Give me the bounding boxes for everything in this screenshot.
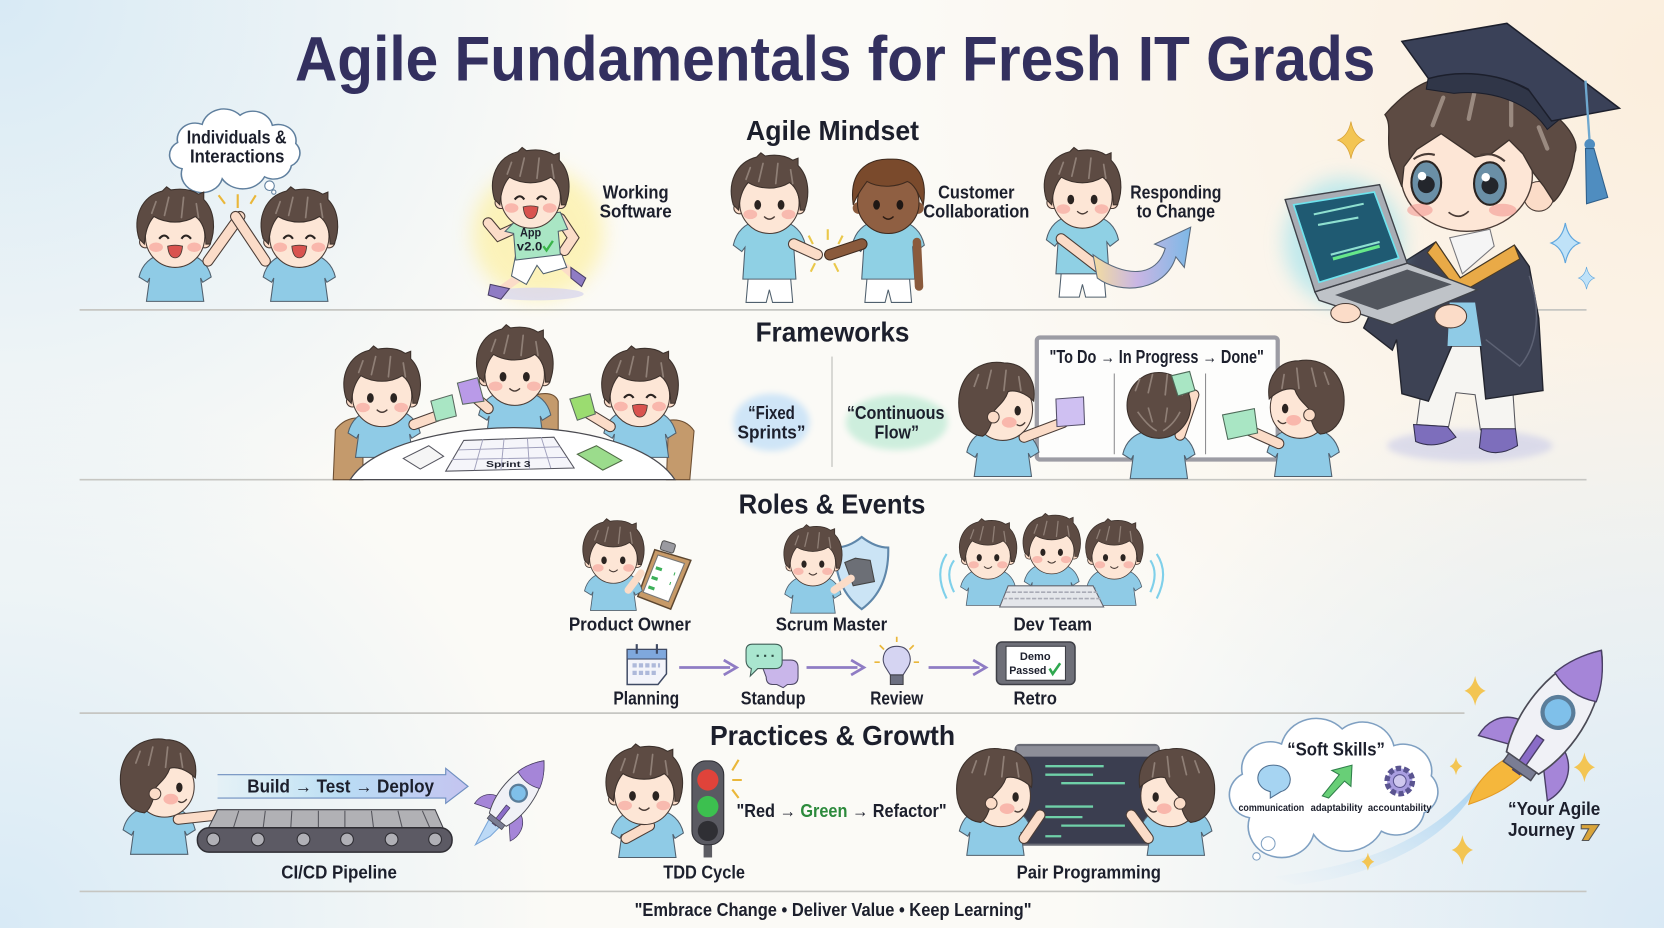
- label: Customer Collaboration: Collaboration: [923, 202, 1029, 222]
- two kids: [957, 749, 1215, 855]
- sparkles: [1338, 122, 1594, 289]
- panel: responding to change: [1044, 148, 1221, 297]
- kid holding rainbow arrow: [1044, 148, 1191, 297]
- event labels: Planning: [613, 689, 679, 709]
- glow behind laptop: [1284, 178, 1403, 306]
- role: Product Owner: Product Owner: [569, 614, 691, 634]
- label: Working Software: Software: [600, 202, 672, 222]
- running kid: v2.0: [517, 240, 542, 253]
- gown: [1364, 242, 1543, 401]
- title: Agile Fundamentals for Fresh IT Grads: [295, 25, 1375, 95]
- icon: tablet Demo Passed: [996, 642, 1075, 684]
- skill labels: accountability: [1368, 803, 1432, 814]
- kid pushing conveyor: [120, 739, 218, 854]
- panel: TDD cycle: TDD Cycle: [663, 863, 745, 883]
- whiteboard: "To Do → In Progress → Done": [1050, 347, 1264, 367]
- label: Customer Collaboration: Customer: [938, 182, 1015, 202]
- label: Your Agile Journey: “Your Agile: [1508, 799, 1600, 819]
- whiteboard: [1037, 337, 1278, 460]
- held cards: [431, 378, 595, 421]
- role: Scrum Master: [776, 525, 888, 634]
- collar and hood: [1427, 242, 1520, 293]
- icon: small rocket: [470, 743, 564, 845]
- kid: [784, 525, 851, 613]
- role: Product Owner: [569, 519, 691, 634]
- heading: Agile Mindset: Agile Mindset: [746, 115, 919, 146]
- graduation cap: [1402, 23, 1619, 129]
- panel: your agile journey rocket: [1273, 621, 1639, 885]
- panel: customer collaboration: [731, 153, 1029, 302]
- chairs: [333, 394, 694, 480]
- role: Scrum Master: Scrum Master: [776, 614, 887, 634]
- thought cloud: Individuals & Interactions: Interactions: [190, 146, 284, 166]
- running kid: [488, 148, 586, 300]
- clipboard: [638, 540, 691, 609]
- tassel: [1584, 81, 1608, 204]
- panel: CI/CD pipeline: [120, 739, 564, 883]
- icon: green arrow: [1322, 765, 1352, 798]
- table with calendar and cards: [350, 428, 675, 480]
- skill labels: adaptability: [1311, 803, 1363, 814]
- icon: calendar: [627, 644, 666, 684]
- laptop: [1285, 185, 1477, 325]
- skill labels: [1238, 803, 1432, 814]
- yellow glow: [472, 168, 604, 299]
- arrow: [679, 660, 736, 675]
- label: Responding to Change: Responding: [1130, 182, 1221, 202]
- rocket trail: [1273, 780, 1480, 885]
- footer tagline: "Embrace Change • Deliver Value • Keep Learning": [635, 900, 1032, 920]
- icon: gear: [1387, 768, 1412, 794]
- conveyor belt: [197, 810, 452, 852]
- icon: tablet Demo Passed: Demo: [1020, 651, 1051, 663]
- label: Customer Collaboration: [923, 182, 1029, 222]
- two kids shaking hands: [731, 153, 924, 302]
- event labels: Retro: [1013, 689, 1057, 709]
- shield: [835, 537, 888, 609]
- bubble: Fixed Sprints: Sprints”: [738, 422, 805, 442]
- three kids: [344, 325, 678, 457]
- three kids with keyboard: [959, 513, 1143, 607]
- kid: [583, 519, 644, 610]
- kids moving cards: [959, 360, 1344, 479]
- label: Responding to Change: to Change: [1137, 202, 1215, 222]
- text: Red Green Refactor: "Red → Green → Refactor": [736, 801, 947, 821]
- label: Your Agile Journey: Journey: [1508, 820, 1575, 840]
- heading: Roles & Events: Roles & Events: [739, 489, 925, 520]
- icon: light bulb: [874, 637, 919, 684]
- icon: traffic light: [692, 760, 742, 857]
- panel: TDD cycle: [606, 744, 947, 883]
- panel: individuals and interactions: [137, 109, 338, 301]
- event labels: [613, 689, 1057, 709]
- event flow: [613, 637, 1075, 709]
- label: Working Software: Working: [603, 182, 669, 202]
- trousers and shoes: [1414, 345, 1518, 453]
- panel: soft skills thought cloud: [1229, 718, 1438, 860]
- arrow: Build Test Deploy: [218, 768, 468, 803]
- kid: [606, 744, 683, 857]
- icon: speech bubble: [1258, 765, 1290, 798]
- heading: Frameworks: Frameworks: [756, 317, 909, 348]
- table with calendar and cards: Sprint 3: [486, 459, 531, 469]
- bubble: Continuous Flow: [846, 395, 948, 450]
- label: Working Software: [600, 182, 672, 222]
- flame: [1469, 756, 1528, 804]
- cloud: [1229, 718, 1438, 860]
- running kid: App: [520, 227, 541, 240]
- panel: pair programming: Pair Programming: [1017, 863, 1161, 883]
- panel: kanban board: [959, 337, 1344, 479]
- ground shadow: [1387, 430, 1553, 462]
- hands: [1331, 304, 1467, 328]
- icon: tablet Demo Passed: Passed: [1009, 665, 1047, 677]
- icon: chat bubbles: [746, 644, 798, 688]
- gold sparkles: [1362, 676, 1595, 871]
- arrow: Build Test Deploy: Build → Test → Deploy: [247, 777, 434, 797]
- thought cloud: Individuals & Interactions: [170, 109, 300, 194]
- panel: team at sprint table: [333, 325, 694, 480]
- bubble: Continuous Flow: Flow”: [874, 422, 919, 442]
- code monitor: [1016, 745, 1159, 845]
- panel: CI/CD pipeline: CI/CD Pipeline: [281, 863, 397, 883]
- label: Your Agile Journey: [1508, 799, 1600, 840]
- arrow: [929, 660, 986, 675]
- panel: pair programming: [957, 745, 1215, 883]
- event labels: Standup: [741, 689, 805, 709]
- event labels: Review: [870, 689, 924, 709]
- motion waves: [940, 554, 1163, 599]
- skill labels: communication: [1238, 803, 1304, 814]
- bubble: Fixed Sprints: [733, 394, 810, 451]
- heading: Practices & Growth: Practices & Growth: [710, 720, 955, 751]
- role: Dev Team: Dev Team: [1013, 614, 1092, 634]
- big head: [1385, 79, 1576, 231]
- panel: working software: [472, 148, 672, 300]
- panel: scrum versus kanban bubbles: [733, 357, 948, 467]
- panel: soft skills thought cloud: “Soft Skills”: [1287, 740, 1385, 760]
- big rocket: [1470, 621, 1639, 803]
- thought cloud: Individuals & Interactions: Individuals &: [187, 127, 287, 147]
- graduate kid with laptop: [1284, 23, 1619, 462]
- arrow: [807, 660, 864, 675]
- kids high five: [137, 187, 338, 301]
- role: Dev Team: [940, 513, 1163, 634]
- bubble: Fixed Sprints: “Fixed: [748, 403, 795, 423]
- label: Responding to Change: [1130, 182, 1221, 222]
- bubble: Continuous Flow: “Continuous: [847, 403, 944, 423]
